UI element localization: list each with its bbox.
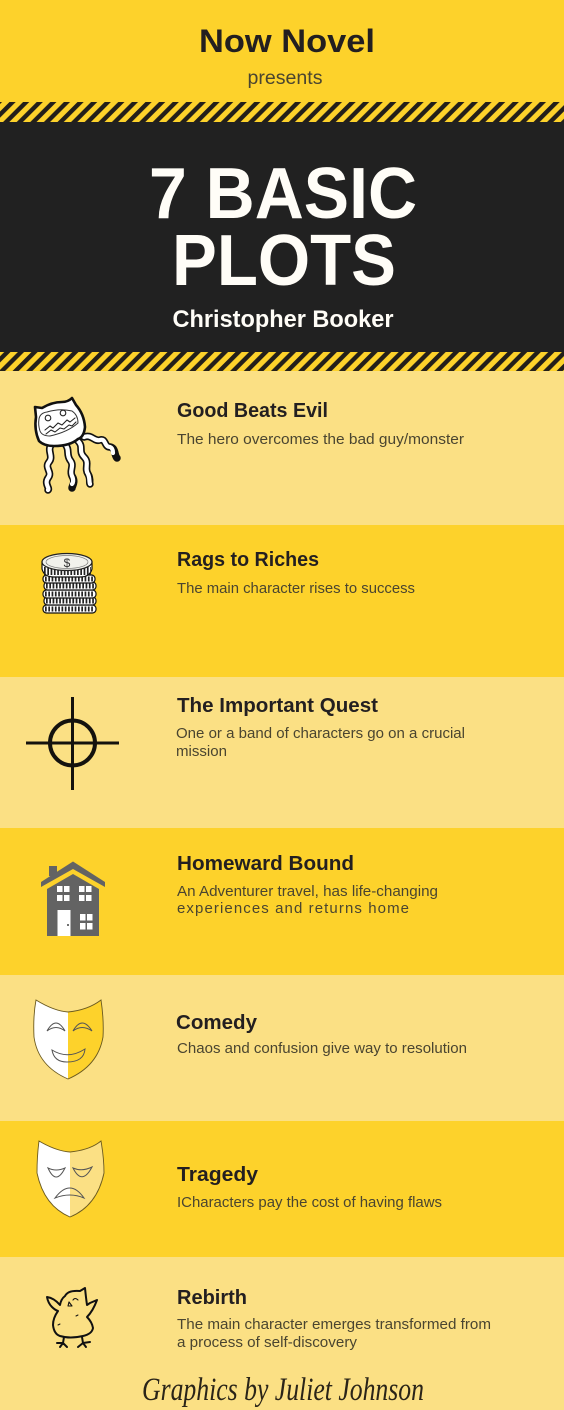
description continued: a process of self-discovery xyxy=(177,1335,358,1351)
icon: coin stack xyxy=(42,554,96,613)
header band xyxy=(0,0,564,103)
icon: crosshair xyxy=(26,697,119,790)
heading: Good Beats Evil xyxy=(177,400,328,422)
hazard stripe top xyxy=(0,102,564,122)
description: One or a band of characters go on a crucial xyxy=(176,726,465,742)
description: The main character emerges transformed from xyxy=(177,1317,491,1333)
title line two: PLOTS xyxy=(172,221,396,301)
description: ICharacters pay the cost of having flaws xyxy=(177,1195,442,1211)
heading: Tragedy xyxy=(177,1164,259,1186)
icon: monster xyxy=(35,398,117,490)
description: Chaos and confusion give way to resolution xyxy=(177,1041,467,1057)
credit: Graphics by Juliet Johnson xyxy=(142,1372,424,1408)
panel: homeward bound xyxy=(0,828,564,975)
description: An Adventurer travel, has life-changing xyxy=(177,884,438,900)
icon: comedy mask xyxy=(34,1000,103,1079)
publisher name: Now Novel xyxy=(199,23,375,59)
icon: coin stack: $ xyxy=(64,556,71,570)
icon: tragedy mask xyxy=(37,1141,104,1217)
author: Christopher Booker xyxy=(172,306,394,333)
description continued: mission xyxy=(176,744,227,760)
presents line: presents xyxy=(248,68,322,89)
description continued: experiences and returns home xyxy=(177,900,409,917)
panel: rags to riches xyxy=(0,525,564,677)
heading: The Important Quest xyxy=(177,695,378,717)
icon: house xyxy=(41,862,105,936)
description: The hero overcomes the bad guy/monster xyxy=(177,432,464,448)
description: The main character rises to success xyxy=(177,581,415,597)
icon: chick xyxy=(47,1288,97,1347)
title panel xyxy=(0,122,564,352)
heading: Comedy xyxy=(176,1012,258,1034)
panel: good beats evil xyxy=(0,371,564,525)
panel: comedy xyxy=(0,975,564,1121)
title line one: 7 BASIC xyxy=(149,154,417,234)
panel: tragedy xyxy=(0,1121,564,1257)
heading: Rags to Riches xyxy=(177,549,319,571)
heading: Rebirth xyxy=(177,1287,247,1309)
panel: rebirth xyxy=(0,1257,564,1410)
hazard stripe bottom xyxy=(0,352,564,371)
heading: Homeward Bound xyxy=(177,853,354,875)
panel: the important quest xyxy=(0,677,564,828)
